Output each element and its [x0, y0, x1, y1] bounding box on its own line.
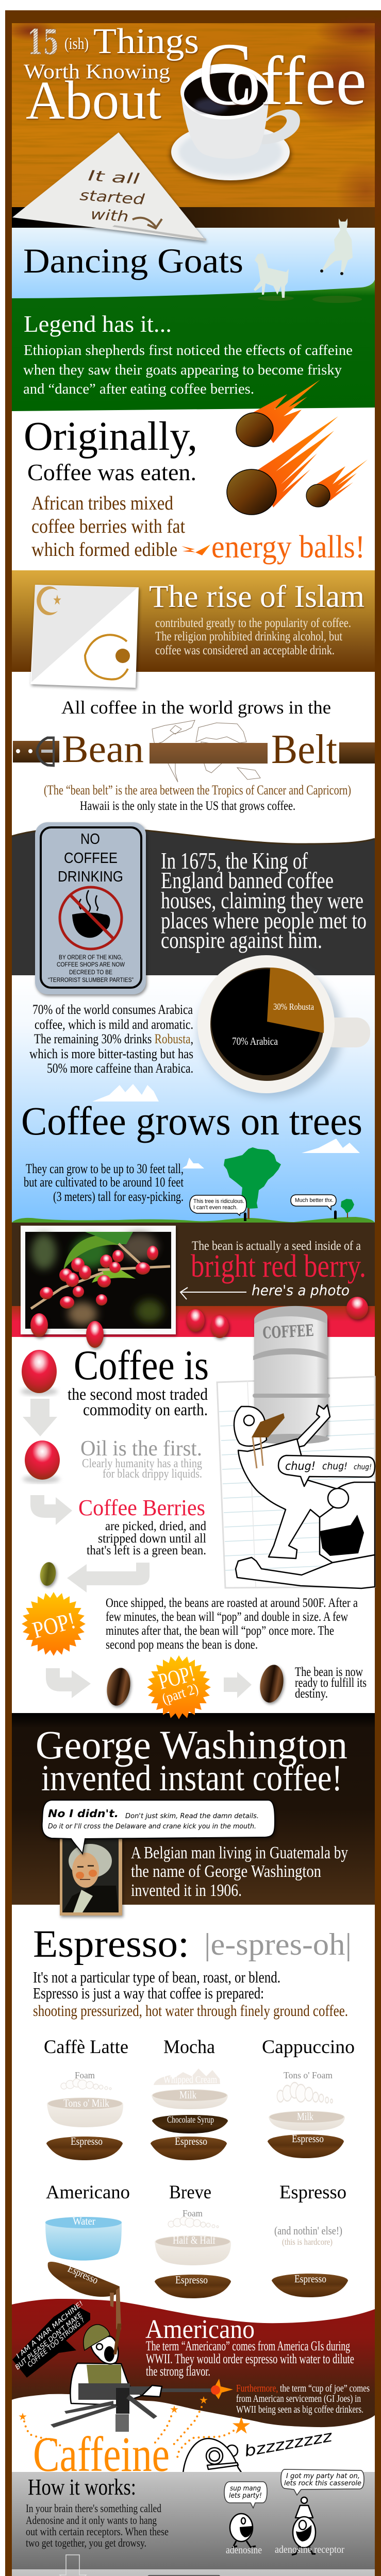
icon: roasted bean big	[257, 1663, 286, 1704]
text: bean ready	[295, 1665, 367, 1701]
callout: chug chug chug	[278, 1455, 375, 1486]
drink: mocha: Chocolate Syrup	[167, 2114, 214, 2125]
callout: no I didn't	[42, 1800, 275, 1854]
panel: title wood table	[5, 15, 381, 228]
callout: sup mang: sup mang	[230, 2485, 261, 2493]
callout: no I didn't: Do it or I'll cross the Delaware and crane kick you in the mouth.	[48, 1823, 256, 1831]
callout: forget that guy	[146, 2575, 222, 2576]
heading: caffeine: Caffeine	[33, 2427, 170, 2482]
text: arabica and robusta: coffee, which is mild and aromatic.	[35, 1017, 193, 1032]
napkin: it all started with: started	[79, 187, 145, 208]
arrow: grey turn right second	[46, 1668, 91, 1698]
illustration: character chugging from barrel	[234, 1405, 375, 1588]
machine gun	[51, 2383, 211, 2432]
text: legend has it: and “dance” after eating coffee berries.	[23, 381, 254, 397]
text: adenosine: out with certain receptors. When these	[26, 2525, 169, 2538]
text: adenosine: two get together, you get drowsy.	[26, 2536, 146, 2549]
drink: espresso: Espresso	[294, 2273, 326, 2285]
text: roasting: second pop means the bean is done.	[106, 1638, 258, 1652]
illustration: sleeping character	[183, 2427, 334, 2473]
callout: party hat: lets rock this casserole	[284, 2480, 361, 2487]
icon: no coffee drinking sign: DECREED TO BE	[69, 969, 112, 976]
icon: tall coffee tree	[224, 1147, 281, 1219]
text: legend has it: Legend has it...	[24, 311, 172, 337]
callout: i am a war machine: COFFEE TOO STRONG ?	[26, 2317, 87, 2369]
text: definition	[33, 1968, 348, 2020]
text: oil is the first: for black drippy liquids.	[103, 1467, 202, 1481]
drink: mocha: Whipped Cream	[163, 2074, 217, 2086]
icon: no coffee drinking sign	[35, 822, 146, 994]
text: oil is the first: Clearly humanity has a thing	[82, 1457, 202, 1470]
label: coffee: COFFEE	[262, 1321, 314, 1343]
drink: breve: Half & Half	[173, 2234, 216, 2246]
text: here's a photo: here's a photo	[252, 1282, 350, 1299]
panel: americano explanation	[12, 2287, 375, 2473]
icon: red berry large	[21, 1350, 58, 1396]
drink: cappuccino: Cappuccino	[262, 2037, 355, 2058]
drink: breve: Breve	[169, 2182, 211, 2203]
text: coffee berries: are picked, dried, and	[105, 1519, 206, 1533]
text: legend has it: Ethiopian shepherds first noticed the effects of caffeine	[24, 343, 353, 359]
heading: dancing goats: Dancing Goats	[23, 241, 243, 280]
icon: pop burst part 2: (part 2)	[160, 1681, 201, 1707]
callout: no I didn't: Don't just skim, Read the damn details.	[125, 1812, 259, 1820]
icon: goat rearing	[320, 218, 353, 275]
callout: tree is ridiculous: This tree is ridiculous.	[193, 1198, 244, 1205]
text: tree height: (3 meters) tall for easy-picking.	[53, 1189, 184, 1204]
drink: caffe latte: Tons o' Milk	[63, 2097, 109, 2109]
drink: mocha: Espresso	[175, 2135, 207, 2147]
text: arabica and robusta: 50% more caffeine than Arabica.	[47, 1061, 193, 1076]
photo: coffee berries on branch	[21, 1226, 176, 1334]
drink: caffe latte	[44, 2037, 128, 2160]
heading: coffee is: Coffee is	[74, 1342, 209, 1388]
heading: how it works: How it works:	[28, 2475, 136, 2500]
text: second most traded: commodity on earth.	[83, 1401, 208, 1419]
drink: cappuccino: Milk	[297, 2110, 313, 2123]
icon: no coffee drinking sign: NO	[80, 831, 100, 848]
arrow: grey down	[23, 1399, 57, 1436]
title text: Things	[93, 22, 199, 61]
icon: crossed out coffee cup	[60, 887, 122, 949]
icon: falling red berries	[30, 1297, 368, 1348]
panel: bright red berry	[12, 1223, 375, 1337]
text: king of england	[161, 848, 367, 953]
text: african tribes: coffee berries with fat	[31, 516, 185, 537]
icon: espresso pour drips	[110, 2287, 121, 2333]
text: belgian man: invented it in 1906.	[131, 1881, 242, 1900]
illustration: soldier with machine gun	[51, 2324, 233, 2432]
drink: espresso: Espresso	[279, 2182, 346, 2203]
arrow: grey right	[224, 1672, 252, 1698]
drink: americano	[45, 2182, 130, 2297]
heading: originally: Originally,	[24, 414, 197, 459]
text: definition: It's not a particular type of bean, roast, or blend.	[33, 1968, 280, 1986]
text: coffee berries	[78, 1495, 206, 1557]
text: americano heading: Americano	[145, 2315, 255, 2344]
subheading: coffee was eaten: Coffee was eaten.	[27, 459, 196, 485]
title text: offee	[226, 43, 367, 120]
callout: party hat: I got my party hat on,	[286, 2472, 360, 2480]
text: arabica and robusta: 70% of the world consumes Arabica	[32, 1002, 193, 1017]
drink: espresso	[272, 2182, 348, 2297]
panel: bean belt	[13, 697, 375, 813]
text: tree height: They can grow to be up to 30 feet tall,	[26, 1161, 184, 1176]
text: african tribes: which formed edible	[31, 539, 177, 561]
chart: coffee cup pie arabica vs robusta	[197, 955, 370, 1097]
icon: goat shadows	[258, 296, 362, 303]
heading: coffee grows on trees: Coffee grows on trees	[21, 1098, 362, 1143]
icon: adenosine receptor character	[292, 2497, 316, 2555]
icon: flaming coffee bean small	[236, 380, 320, 447]
panel: coffee types sky background	[12, 975, 375, 1223]
text: coffee berries: Coffee Berries	[78, 1495, 205, 1520]
text: arabica and robusta: which is more bitter-tasting but has	[29, 1046, 193, 1061]
callout: tree is ridiculous: I can't even reach.	[193, 1205, 238, 1211]
text: islam	[155, 616, 351, 657]
text: adenosine: In your brain there's something called	[26, 2502, 161, 2515]
drink: cappuccino: Tons o' Foam	[284, 2070, 333, 2080]
red berry band	[12, 1306, 375, 1337]
text: tree height: but are cultivated to be around 10 feet	[24, 1175, 184, 1190]
icon: no coffee drinking sign: COFFEE	[64, 850, 118, 867]
callout: chug chug chug: chug!	[354, 1463, 372, 1471]
icon: goat standing	[254, 253, 289, 298]
arrow: napkin	[132, 218, 162, 228]
icon: roasted bean small	[104, 1666, 133, 1707]
heading: all coffee in the world: All coffee in the world grows in the	[61, 697, 331, 718]
text: king of england: In 1675, the King of	[161, 848, 308, 874]
title text: C	[198, 24, 253, 124]
heading: george washington: George Washington	[36, 1722, 347, 1767]
panel: coffee grows on trees	[12, 1084, 375, 1223]
drink: americano: Americano	[46, 2182, 130, 2203]
title text: (ish)	[64, 34, 89, 53]
panel: second most traded commodity	[21, 1297, 375, 1707]
text: roasting	[106, 1596, 358, 1652]
drink: breve: Foam	[183, 2208, 203, 2218]
icon: clouds	[92, 1084, 360, 1168]
text: pronunciation: |e-spres-oh|	[204, 1927, 352, 1961]
callout: chug chug chug: chug!	[322, 1461, 347, 1472]
label: adenosine: adenosine	[226, 2545, 262, 2556]
text: belgian man	[131, 1843, 348, 1900]
heading: invented instant coffee: invented instant coffee!	[41, 1757, 342, 1799]
muzzle flash	[212, 2379, 233, 2399]
title text: 15	[27, 22, 59, 62]
icon: short coffee tree	[341, 1199, 354, 1218]
outline arrow: first down arrow	[60, 2555, 86, 2576]
drink: caffe latte: Espresso	[71, 2135, 103, 2147]
coffee stream	[113, 2324, 122, 2354]
napkin: it all started with: with	[90, 206, 129, 225]
text: hawaii: Hawaii is the only state in the US that grows coffee.	[80, 799, 295, 813]
grass and green text panel	[12, 280, 375, 412]
icon: world map outline	[152, 720, 260, 782]
callout: no I didn't: No I didn't.	[48, 1807, 119, 1820]
panel: originally coffee was eaten	[12, 380, 375, 570]
text: bean ready: destiny.	[295, 1687, 328, 1701]
heading: espresso: Espresso:	[33, 1923, 189, 1965]
text: belgian man: the name of George Washington	[131, 1862, 321, 1881]
text: bzzz: bzzzzzzzz	[243, 2427, 334, 2461]
panel: king banned coffee houses	[12, 829, 375, 975]
icon: red berry second	[23, 1440, 60, 1483]
icon: pop burst part 2	[147, 1655, 211, 1719]
text: coffee berries: stripped down until all	[98, 1532, 206, 1546]
callout: much better	[291, 1195, 336, 1210]
heading: rise of islam: The rise of Islam	[149, 580, 365, 614]
drink: mocha: Mocha	[163, 2037, 215, 2058]
icon: no coffee drinking sign: “TERRORIST SLUMBER PARTIES”	[48, 976, 134, 984]
text: cup of joe	[236, 2383, 370, 2415]
text: second most traded	[68, 1385, 208, 1419]
drink: mocha: Milk	[179, 2089, 196, 2101]
illustration: notebook paper	[217, 1377, 375, 1588]
label: arabica: 70% Arabica	[232, 1035, 278, 1047]
napkin: it all started with	[12, 132, 206, 241]
icon: pop burst: POP!	[29, 1607, 78, 1643]
panel: espresso definition	[33, 1923, 352, 2020]
text: oil is the first: Oil is the first.	[80, 1437, 202, 1461]
text: adenosine: Adenosine and it only wants to hang	[26, 2514, 157, 2527]
drink: cappuccino: Espresso	[292, 2132, 324, 2145]
text: americano body	[146, 2338, 354, 2379]
drink: breve: Espresso	[175, 2274, 208, 2286]
text: definition: Espresso is just a way that coffee is prepared:	[33, 1984, 264, 2002]
napkin: it all started with: It all	[88, 167, 140, 188]
callout: tree is ridiculous	[190, 1195, 246, 1215]
drink: caffe latte: Foam	[75, 2070, 95, 2080]
arrow: grey left	[67, 1563, 150, 1592]
panel: dancing goats	[12, 218, 375, 412]
title text	[24, 22, 367, 130]
drink: cappuccino	[262, 2037, 355, 2158]
title text: Worth Knowing	[24, 60, 170, 83]
text: arabica and robusta: The remaining 30% drinks Robusta,	[34, 1031, 193, 1046]
text: king of england: England banned coffee	[161, 868, 334, 893]
title text: About	[26, 70, 161, 130]
callout: party hat	[281, 2469, 364, 2495]
text: legend has it: when they saw their goats appearing to become frisky	[23, 362, 342, 378]
heading: bean belt	[62, 727, 337, 772]
icon: green bean	[39, 1561, 57, 1587]
text: tree height	[24, 1161, 184, 1204]
callout: chug chug chug: chug!	[285, 1460, 316, 1473]
text: roasting: minutes after that, the bean will “pop” once more. The	[106, 1624, 334, 1638]
icon: belt with buckle	[13, 737, 375, 767]
callout: sup mang	[224, 2482, 267, 2508]
icon: people	[244, 1211, 337, 1221]
icon: no coffee drinking sign: BY ORDER OF THE KING,	[59, 954, 123, 961]
text: islam: coffee was considered an acceptable drink.	[155, 643, 335, 657]
text: legend has it	[23, 311, 353, 397]
photo: portrait of washington	[60, 1834, 122, 1916]
icon: stars with dotted trails	[19, 2396, 250, 2459]
callout: much better: Much better thx.	[295, 1197, 334, 1204]
icon: hills	[12, 1217, 375, 1223]
panel: the rise of islam	[12, 570, 375, 688]
heading: bean belt: Belt	[271, 727, 337, 772]
text: islam: The religion prohibited drinking alcohol, but	[155, 630, 342, 643]
text: americano body: the strong flavor.	[146, 2364, 210, 2379]
icon: pop burst	[22, 1592, 86, 1656]
icon: no coffee drinking sign: COFFEE SHOPS ARE NOW	[57, 961, 125, 968]
arrow: to photo	[180, 1287, 246, 1299]
drink: mocha	[151, 2037, 228, 2160]
callout: i am a war machine: BUT PLEASE DON'T MAKE	[14, 2311, 85, 2371]
heading: bean belt: Bean	[62, 728, 144, 771]
panel: george washington	[12, 1713, 375, 1916]
icon: coffee barrel	[252, 1306, 330, 1444]
drink: espresso: (and nothin' else!)	[274, 2224, 342, 2237]
icon: adenosine character	[230, 2514, 256, 2547]
text: arabica and robusta	[29, 1002, 193, 1076]
drink: caffe latte: Caffè Latte	[44, 2037, 128, 2058]
callout: sup mang: lets party!	[229, 2492, 262, 2500]
icon: no coffee drinking sign: DRINKING	[58, 869, 123, 885]
text: adenosine	[26, 2502, 169, 2549]
label: robusta: 30% Robusta	[273, 1002, 314, 1012]
text: african tribes	[31, 493, 185, 561]
icon: flaming coffee bean tiny	[306, 460, 368, 507]
text: king of england: conspire against him.	[161, 927, 322, 953]
arrow: grey turn right	[30, 1495, 72, 1525]
drink: espresso: (this is hardcore)	[282, 2237, 333, 2247]
text: bean ready: The bean is now	[295, 1665, 363, 1679]
drink: americano: Water	[73, 2215, 95, 2227]
napkin: islamic crescent	[30, 585, 139, 688]
text: oil is the first	[80, 1437, 202, 1481]
text: second most traded: the second most traded	[68, 1385, 208, 1404]
callout: i am a war machine: I AM A WAR MACHINE!	[15, 2300, 85, 2360]
icon: pop burst part 2: POP!	[156, 1660, 198, 1694]
panel: how it works second step	[12, 2569, 375, 2576]
panel: espresso drinks	[44, 2037, 355, 2298]
icon: energy ball flame	[181, 545, 210, 555]
icon: coffee cup and saucer	[170, 64, 300, 183]
icon: flaming coffee bean large	[227, 416, 338, 515]
text: coffee berries: that's left is a green bean.	[87, 1544, 206, 1557]
text: african tribes: African tribes mixed	[31, 493, 173, 514]
drink: breve	[155, 2182, 231, 2298]
dark band under table	[12, 207, 375, 228]
panel: how it works first step	[12, 2469, 375, 2569]
label: adenosine receptor: adenosine receptor	[275, 2544, 344, 2555]
text: energy balls: energy balls!	[211, 530, 365, 565]
drink: americano: Espresso	[66, 2262, 100, 2286]
